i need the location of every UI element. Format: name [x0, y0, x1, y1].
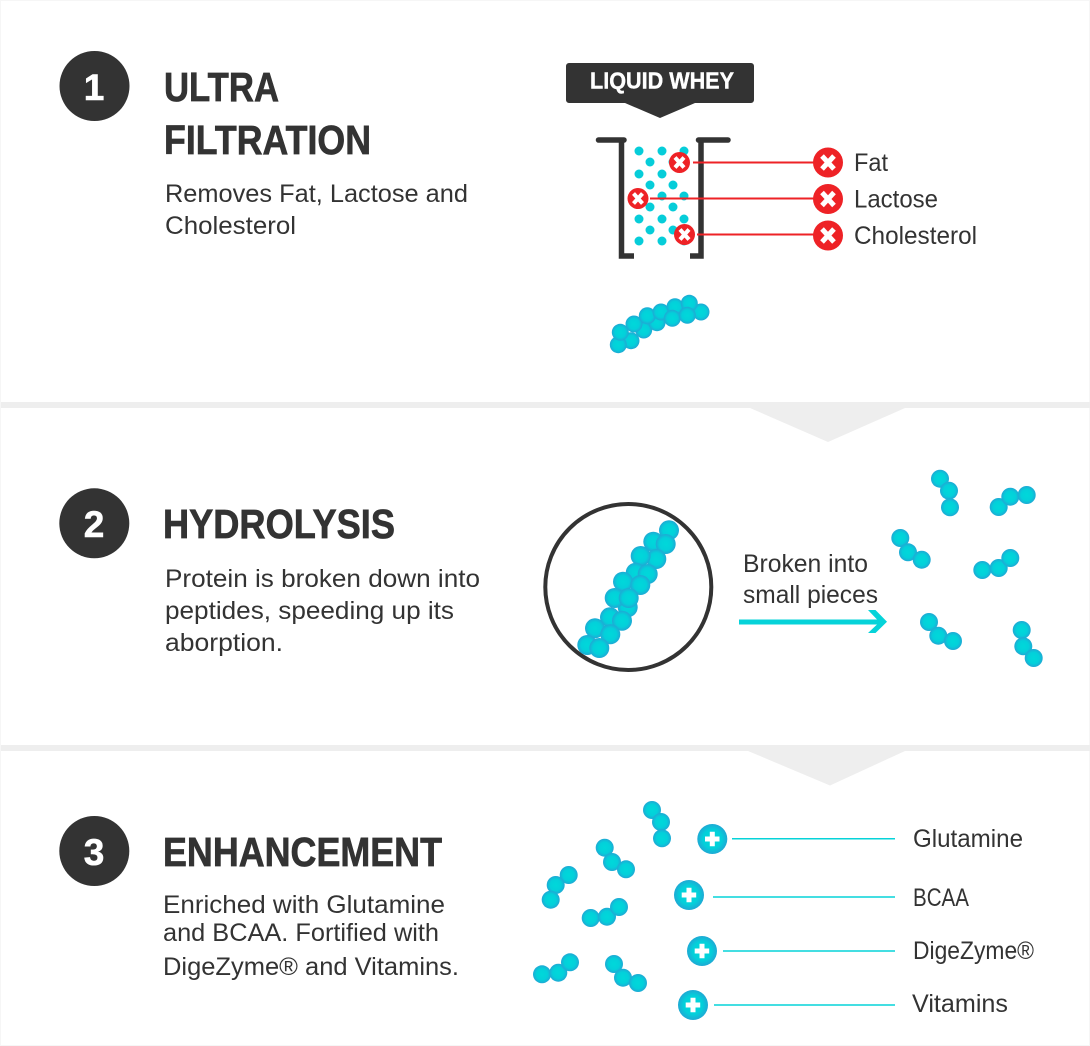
text: enhancement description: and BCAA. Fortified with	[163, 919, 439, 947]
label: liquid whey banner: LIQUID WHEY	[590, 68, 734, 94]
text: broken into small pieces	[743, 550, 878, 609]
heading: ultra filtration: ULTRA	[164, 64, 279, 110]
step number 2: 2	[84, 504, 104, 545]
text: hydrolysis description: aborption.	[165, 629, 283, 657]
text: ultra filtration description: Removes Fat, Lactose and	[165, 180, 468, 208]
step number 1	[60, 51, 130, 121]
step number 2	[59, 488, 129, 558]
protein chain	[610, 295, 710, 353]
divider arrow: step 1 to 2	[1, 402, 1090, 442]
peptides	[891, 470, 1043, 667]
step number 1: 1	[84, 67, 104, 108]
text: broken into small pieces: Broken into	[743, 550, 868, 578]
heading: enhancement: ENHANCEMENT	[163, 829, 442, 875]
addition: digezyme: DigeZyme®	[913, 937, 1035, 965]
text: enhancement description: Enriched with Glutamine	[163, 891, 445, 919]
divider arrow: step 2 to 3	[1, 745, 1090, 786]
addition: digezyme	[687, 936, 1035, 966]
filter brackets	[598, 140, 728, 256]
text: enhancement description	[163, 891, 459, 981]
legend: fat: Fat	[854, 149, 888, 177]
step number 3: 3	[84, 832, 104, 873]
text: hydrolysis description: Protein is broken down into	[165, 565, 480, 593]
heading: ultra filtration: FILTRATION	[164, 117, 371, 163]
text: hydrolysis description	[165, 565, 480, 657]
arrow	[739, 610, 887, 633]
filter dots	[634, 146, 688, 246]
legend: fat	[813, 148, 888, 178]
step number 3	[59, 816, 129, 886]
text: ultra filtration description: Cholesterol	[165, 212, 296, 240]
text: hydrolysis description: peptides, speeding up its	[165, 597, 454, 625]
addition: glutamine	[697, 824, 1023, 854]
panel: hydrolysis	[59, 470, 1043, 670]
addition: bcaa: BCAA	[913, 884, 969, 912]
protein chain magnified	[577, 520, 679, 658]
heading: ultra filtration	[164, 64, 371, 163]
magnifier circle	[545, 504, 711, 670]
legend: lactose	[813, 184, 938, 214]
legend: lactose: Lactose	[854, 186, 938, 214]
addition: glutamine: Glutamine	[913, 825, 1023, 853]
text: enhancement description: DigeZyme® and Vitamins.	[163, 953, 459, 981]
removed particles	[628, 152, 695, 245]
label: liquid whey banner	[566, 63, 754, 118]
panel: enhancement	[59, 801, 1035, 1020]
addition: vitamins: Vitamins	[912, 990, 1008, 1018]
text: ultra filtration description	[165, 180, 468, 240]
addition: vitamins	[678, 990, 1008, 1020]
addition: bcaa	[674, 880, 969, 912]
panel: ultra filtration	[60, 51, 977, 353]
legend: cholesterol: Cholesterol	[854, 222, 977, 250]
text: broken into small pieces: small pieces	[743, 581, 878, 609]
legend: cholesterol	[813, 220, 977, 250]
peptides	[533, 801, 671, 992]
heading: hydrolysis: HYDROLYSIS	[163, 501, 395, 547]
removal lines	[650, 162, 816, 234]
